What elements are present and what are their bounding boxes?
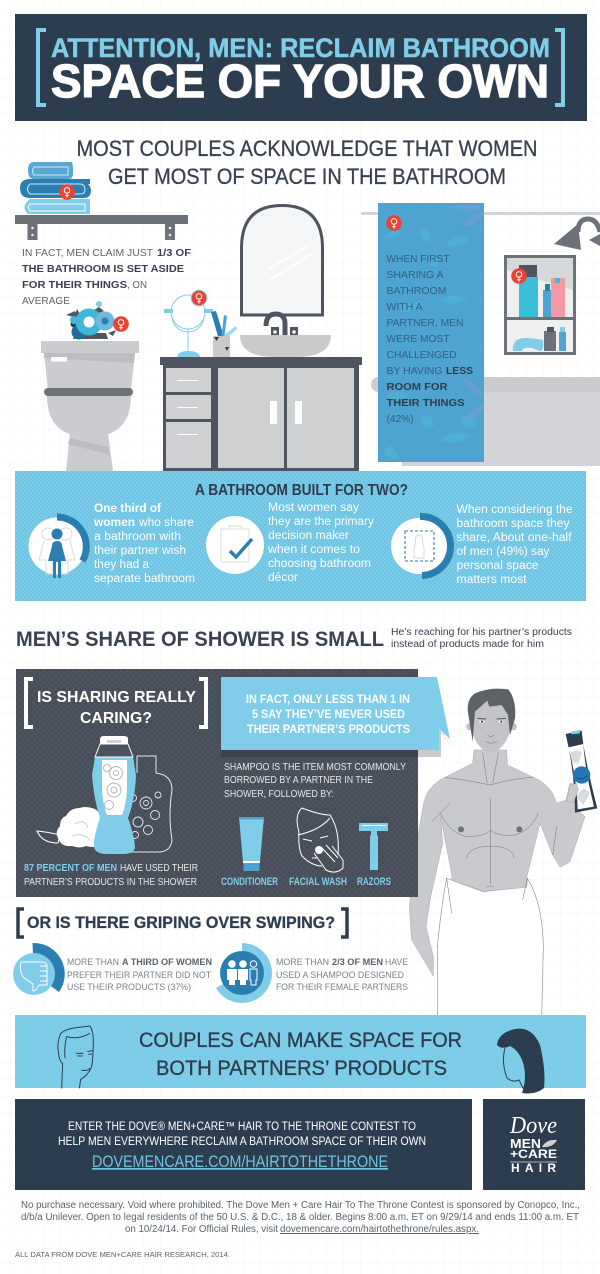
illustration: second bottle outline	[130, 756, 172, 852]
heading: men's share of shower: MEN’S SHARE OF SHOWER IS SMALL	[16, 627, 384, 651]
stat one text: women	[93, 517, 135, 529]
subheading: reaching for products	[391, 626, 572, 650]
product labels: FACIAL WASH	[289, 876, 347, 888]
panel: is sharing really caring	[16, 669, 418, 897]
text: men claim one third: , ON	[127, 279, 147, 291]
stat: two thirds of men people icon	[216, 943, 272, 1003]
text: two thirds of men: MORE THAN	[276, 957, 329, 968]
curtain text: (42%)	[386, 413, 414, 425]
icon: razor	[359, 823, 388, 870]
curtain text: WITH A	[386, 301, 422, 313]
stat three text: matters most	[456, 574, 527, 586]
banner: couples can make space	[15, 1015, 586, 1093]
stat one text: separate bathroom	[94, 573, 195, 585]
stat two text: Most women say	[268, 502, 359, 514]
flowers on toilet tank	[66, 301, 129, 340]
pin: towels	[59, 184, 75, 200]
text: 87 percent	[24, 863, 198, 888]
text: shampoo most borrowed	[224, 762, 406, 800]
sharing heading: IS SHARING REALLY	[37, 689, 196, 706]
panel heading: A BATHROOM BUILT FOR TWO?	[195, 482, 408, 499]
fine print: d/b/a Unilever. Open to legal residents of the 50 U.S. & D.C., 18 & older. Begins 8:00 a.m. ET on 9/29/14 and ends 11:00 a.m. ET	[21, 1212, 579, 1223]
curtain text: CHALLENGED	[386, 349, 457, 361]
text: men claim one third: FOR THEIR THINGS	[22, 279, 127, 291]
curtain text: LESS	[446, 365, 473, 377]
text: third of women: USE THEIR PRODUCTS (37%)	[67, 982, 191, 993]
text: 87 percent: HAVE USED THEIR	[120, 863, 198, 874]
stat one text	[93, 503, 195, 585]
hair	[468, 689, 515, 742]
stat two text	[267, 502, 374, 584]
text: third of women: A THIRD OF WOMEN	[122, 957, 212, 968]
pin: curtain	[386, 215, 402, 231]
vanity cabinet	[160, 357, 362, 471]
illustration: man with shampoo	[409, 689, 597, 1017]
callout: less than 1 in 5: THEIR PARTNER’S PRODUCTS	[247, 722, 410, 736]
product labels: RAZORS	[357, 876, 391, 888]
pin: mirror	[191, 290, 207, 306]
stat two text: décor	[268, 572, 298, 584]
torso and arms	[409, 750, 585, 976]
stat: third of women thumbs down	[13, 943, 65, 995]
illustration: loofah	[37, 807, 100, 848]
stat one text: their partner wish	[94, 545, 186, 557]
sharing heading: CARING?	[80, 710, 152, 727]
banner text	[139, 1028, 462, 1080]
medicine cabinet	[506, 256, 574, 354]
text: two thirds of men: 2/3 OF MEN	[332, 957, 383, 968]
stat three: personal space icon	[391, 516, 451, 576]
fine print: dovemencare.com/hairtothethrone/rules.aspx.	[280, 1224, 479, 1235]
towel	[437, 878, 543, 1017]
stat three text: personal space	[456, 560, 538, 572]
facial features	[432, 718, 557, 913]
stat two text: when it comes to	[267, 544, 360, 556]
stat two text: choosing bathroom	[268, 558, 371, 570]
stat two: decision checklist icon	[206, 516, 264, 574]
bathtub	[371, 377, 600, 466]
curtain text: WERE MOST	[386, 333, 450, 345]
stat one text: they had a	[94, 559, 150, 571]
text: men claim one third: 1/3 OF	[157, 247, 192, 259]
fine print: on 10/24/14. For Official Rules, visit	[125, 1224, 278, 1235]
curtain text	[386, 253, 473, 425]
stat one text: a bathroom with	[94, 531, 181, 543]
logo panel: Dove Men+Care Hair	[483, 1099, 585, 1190]
shower head	[554, 219, 600, 250]
banner text: BOTH PARTNERS’ PRODUCTS	[156, 1056, 447, 1080]
stat three text	[456, 504, 572, 586]
subheading: reaching for products: instead of products made for him	[391, 638, 544, 650]
icon: conditioner tube	[239, 817, 264, 871]
fine print	[21, 1200, 580, 1235]
toothbrush cup	[211, 311, 237, 357]
text: 87 percent: 87 PERCENT OF MEN	[24, 863, 117, 874]
curtain text: BATHROOM	[386, 285, 446, 297]
heading: couples acknowledge	[76, 136, 538, 189]
text: two thirds of men: HAVE	[385, 957, 408, 968]
text: third of women	[67, 957, 212, 993]
sharing brackets	[26, 679, 206, 727]
toilet	[41, 341, 139, 471]
curtain text: SHARING A	[386, 269, 444, 281]
call to action panel	[15, 1099, 472, 1190]
contest URL: DOVEMENCARE.COM/HAIRTOTHETHRONE	[92, 1152, 388, 1171]
text: men claim one third: AVERAGE	[22, 295, 70, 307]
product labels	[221, 876, 391, 888]
text: men claim one third: THE BATHROOM IS SET ASIDE	[22, 263, 184, 275]
logo panel: Dove Men+Care Hair: HAIR	[511, 1161, 556, 1175]
text: shampoo most borrowed: SHOWER, FOLLOWED BY:	[224, 789, 334, 800]
call to action text: ENTER THE DOVE® MEN+CARE™ HAIR TO THE THRONE CONTEST TO	[68, 1121, 416, 1133]
shower curtain rod	[361, 212, 600, 215]
pin: cabinet	[511, 268, 527, 284]
logo panel: Dove Men+Care Hair: MEN	[510, 1137, 541, 1151]
callout: less than 1 in 5: 5 SAY THEY’VE NEVER USED	[252, 707, 405, 721]
curtain text: WHEN FIRST	[386, 253, 450, 265]
curtain text: THEIR THINGS	[386, 397, 464, 409]
stat three text: When considering the	[456, 504, 572, 516]
stat two text: decision maker	[268, 530, 349, 542]
pin: flowers	[113, 316, 129, 332]
text: third of women: PREFER THEIR PARTNER DID NOT	[67, 970, 211, 981]
text: two thirds of men: FOR THEIR FEMALE PARTNERS	[276, 982, 408, 993]
heading: griping over swiping: OR IS THERE GRIPING OVER SWIPING?	[27, 913, 335, 932]
icon: woman's face and hair	[497, 1029, 544, 1093]
curtain text: PARTNER, MEN	[386, 317, 464, 329]
text: third of women: MORE THAN	[67, 957, 119, 968]
heading: couples acknowledge: GET MOST OF SPACE IN THE BATHROOM	[108, 164, 506, 189]
call to action text: HELP MEN EVERYWHERE RECLAIM A BATHROOM SPACE OF THEIR OWN	[58, 1136, 426, 1148]
text: shampoo most borrowed: BORROWED BY A PARTNER IN THE	[224, 775, 373, 786]
fine print: No purchase necessary. Void where prohibited. The Dove Men + Care Hair To The Throne Contest is sponsored by Conopco, Inc.,	[21, 1200, 580, 1211]
icon: man's face	[58, 1026, 93, 1088]
stat two text: they are the primary	[268, 516, 374, 528]
text: men claim one third: IN FACT, MEN CLAIM JUST	[22, 247, 154, 259]
logo panel: Dove Men+Care Hair: Dove	[509, 1113, 557, 1139]
text: men claim one third	[22, 247, 192, 307]
curtain text: ROOM FOR	[386, 381, 448, 393]
logo panel: Dove Men+Care Hair: +CARE	[510, 1147, 557, 1161]
header brackets	[38, 30, 563, 105]
head	[471, 697, 513, 752]
data source note: ALL DATA FROM DOVE MEN+CARE HAIR RESEARCH, 2014.	[15, 1250, 230, 1259]
sharing heading	[37, 689, 196, 727]
heading: couples acknowledge: MOST COUPLES ACKNOWLEDGE THAT WOMEN	[76, 136, 538, 161]
text: 87 percent: PARTNER’S PRODUCTS IN THE SHOWER	[24, 877, 197, 888]
stat one text: One third of	[94, 503, 161, 515]
shower curtain panel	[378, 203, 484, 462]
shelf	[15, 215, 188, 240]
text: two thirds of men	[276, 957, 408, 993]
towels on shelf	[20, 162, 91, 214]
subheading: reaching for products: He’s reaching for his partner’s products	[391, 626, 572, 638]
text: two thirds of men: USED A SHAMPOO DESIGNED	[276, 970, 404, 981]
text: shampoo most borrowed: SHAMPOO IS THE ITEM MOST COMMONLY	[224, 762, 406, 773]
callout: less than 1 in 5: IN FACT, ONLY LESS THAN 1 IN	[246, 692, 410, 706]
stat one text: who share	[138, 517, 194, 529]
shampoo bottle	[566, 730, 597, 813]
title line one: ATTENTION, MEN: RECLAIM BATHROOM	[51, 33, 550, 63]
stat three text: bathroom space they	[456, 518, 570, 530]
header banner	[15, 14, 587, 121]
callout: less than 1 in 5	[221, 677, 454, 757]
product labels: CONDITIONER	[221, 876, 278, 888]
hand mirror	[164, 290, 213, 357]
panel: a bathroom built for two	[15, 471, 586, 601]
illustration: main shampoo bottle	[92, 736, 136, 854]
heading: griping over swiping	[18, 909, 347, 937]
stat three text: of men (49%) say	[456, 546, 550, 558]
title line two: SPACE OF YOUR OWN	[51, 55, 549, 107]
curtain text: BY HAVING	[386, 365, 442, 377]
stat one: separate bathroom	[28, 517, 86, 578]
sink basin	[240, 335, 331, 357]
icon: facial wash face	[297, 808, 343, 872]
banner text: COUPLES CAN MAKE SPACE FOR	[139, 1028, 462, 1052]
wall mirror	[242, 206, 322, 315]
faucet	[266, 314, 298, 335]
stat three text: share, About one-half	[456, 532, 572, 544]
call to action text	[58, 1121, 426, 1148]
